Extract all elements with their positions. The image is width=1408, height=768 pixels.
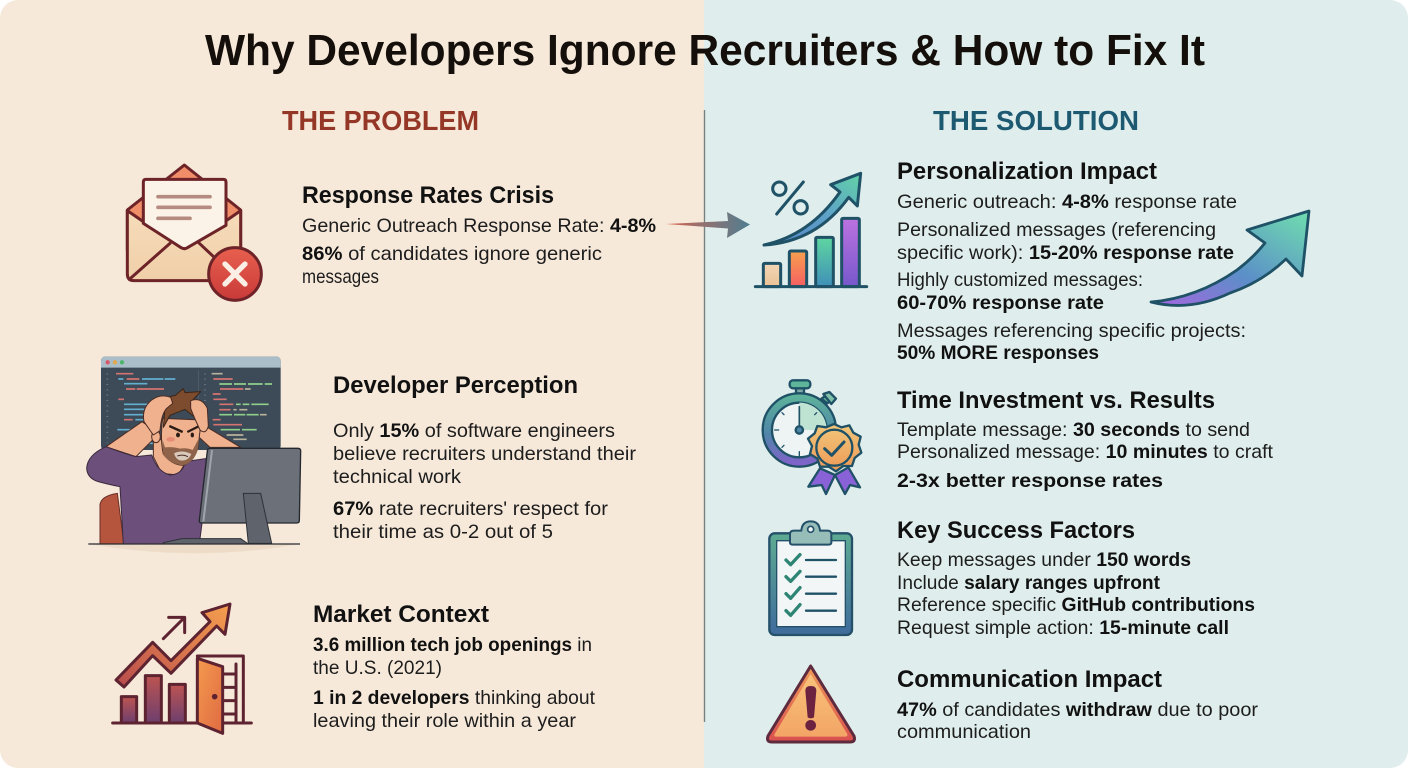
icon: market growth chart with open door xyxy=(113,604,251,733)
panel: time investment xyxy=(897,387,1274,492)
text: template message: Template message: 30 seconds to send xyxy=(897,419,1250,441)
title: Why Developers Ignore Recruiters & How to Fix It xyxy=(205,26,1205,75)
text: personalized messages: Personalized messages (referencing xyxy=(897,219,1216,241)
text: word limit: Keep messages under 150 words xyxy=(897,549,1191,571)
heading: Response Rates Crisis xyxy=(302,182,554,209)
text: generic outreach: Generic Outreach Response Rate: 4-8% xyxy=(302,215,656,237)
text line: the U.S. (2021) xyxy=(313,657,442,679)
text: simple action: Request simple action: 15-minute call xyxy=(897,617,1229,639)
heading: Time Investment vs. Results xyxy=(897,387,1215,414)
text line: 60-70% response rate xyxy=(897,292,1104,314)
heading: Key Success Factors xyxy=(897,517,1135,544)
text: 1 in 2 developers: 1 in 2 developers thinking about xyxy=(313,687,596,709)
icon: clipboard checklist xyxy=(769,521,852,635)
icon: stopwatch with award ribbon xyxy=(763,380,861,494)
arrow: problem to solution xyxy=(666,212,750,238)
heading: Communication Impact xyxy=(897,666,1162,693)
text: 67 percent: 67% rate recruiters' respect for xyxy=(333,498,609,520)
text: only 15 percent: Only 15% of software engineers xyxy=(333,420,615,442)
text: better response rates: 2-3x better response rates xyxy=(897,470,1163,492)
text: salary ranges: Include salary ranges upfront xyxy=(897,572,1160,594)
center divider xyxy=(704,110,706,722)
text line: believe recruiters understand their xyxy=(333,443,637,465)
text: job openings: 3.6 million tech job openings in xyxy=(313,634,592,656)
panel: personalization impact xyxy=(897,158,1246,364)
text line: their time as 0-2 out of 5 xyxy=(333,521,553,543)
text: specific projects: Messages referencing specific projects: xyxy=(897,320,1246,342)
text line: specific work): 15-20% response rate xyxy=(897,242,1234,264)
heading: Market Context xyxy=(313,601,489,628)
panel: market context xyxy=(313,601,596,732)
heading: Developer Perception xyxy=(333,372,578,399)
icon: envelope with error badge xyxy=(127,165,261,300)
panel: key success factors xyxy=(897,517,1255,639)
icon: frustrated developer at computer xyxy=(87,357,301,553)
heading: the solution: THE SOLUTION xyxy=(933,105,1139,136)
text: withdraw: 47% of candidates withdraw due to poor xyxy=(897,699,1259,721)
icon: warning triangle xyxy=(767,666,854,742)
panel: developer perception xyxy=(333,372,637,543)
icon: large rising arrow xyxy=(1151,211,1309,305)
text line: messages xyxy=(302,266,379,288)
text line: 50% MORE responses xyxy=(897,342,1099,364)
panel: communication impact xyxy=(897,666,1259,743)
icon: percent bar chart with rising arrow xyxy=(755,173,867,287)
text line: leaving their role within a year xyxy=(313,710,577,732)
text: highly customized: Highly customized messages: xyxy=(897,269,1143,291)
heading: Personalization Impact xyxy=(897,158,1157,185)
text: 86 percent ignore: 86% of candidates ignore generic xyxy=(302,243,602,265)
text: generic outreach: Generic outreach: 4-8% response rate xyxy=(897,191,1237,213)
text: github: Reference specific GitHub contributions xyxy=(897,594,1255,616)
text: personalized message: Personalized message: 10 minutes to craft xyxy=(897,441,1274,463)
heading: the problem: THE PROBLEM xyxy=(282,105,479,136)
panel: response rates crisis xyxy=(302,182,656,288)
text line: technical work xyxy=(333,466,461,488)
text line: communication xyxy=(897,721,1031,743)
